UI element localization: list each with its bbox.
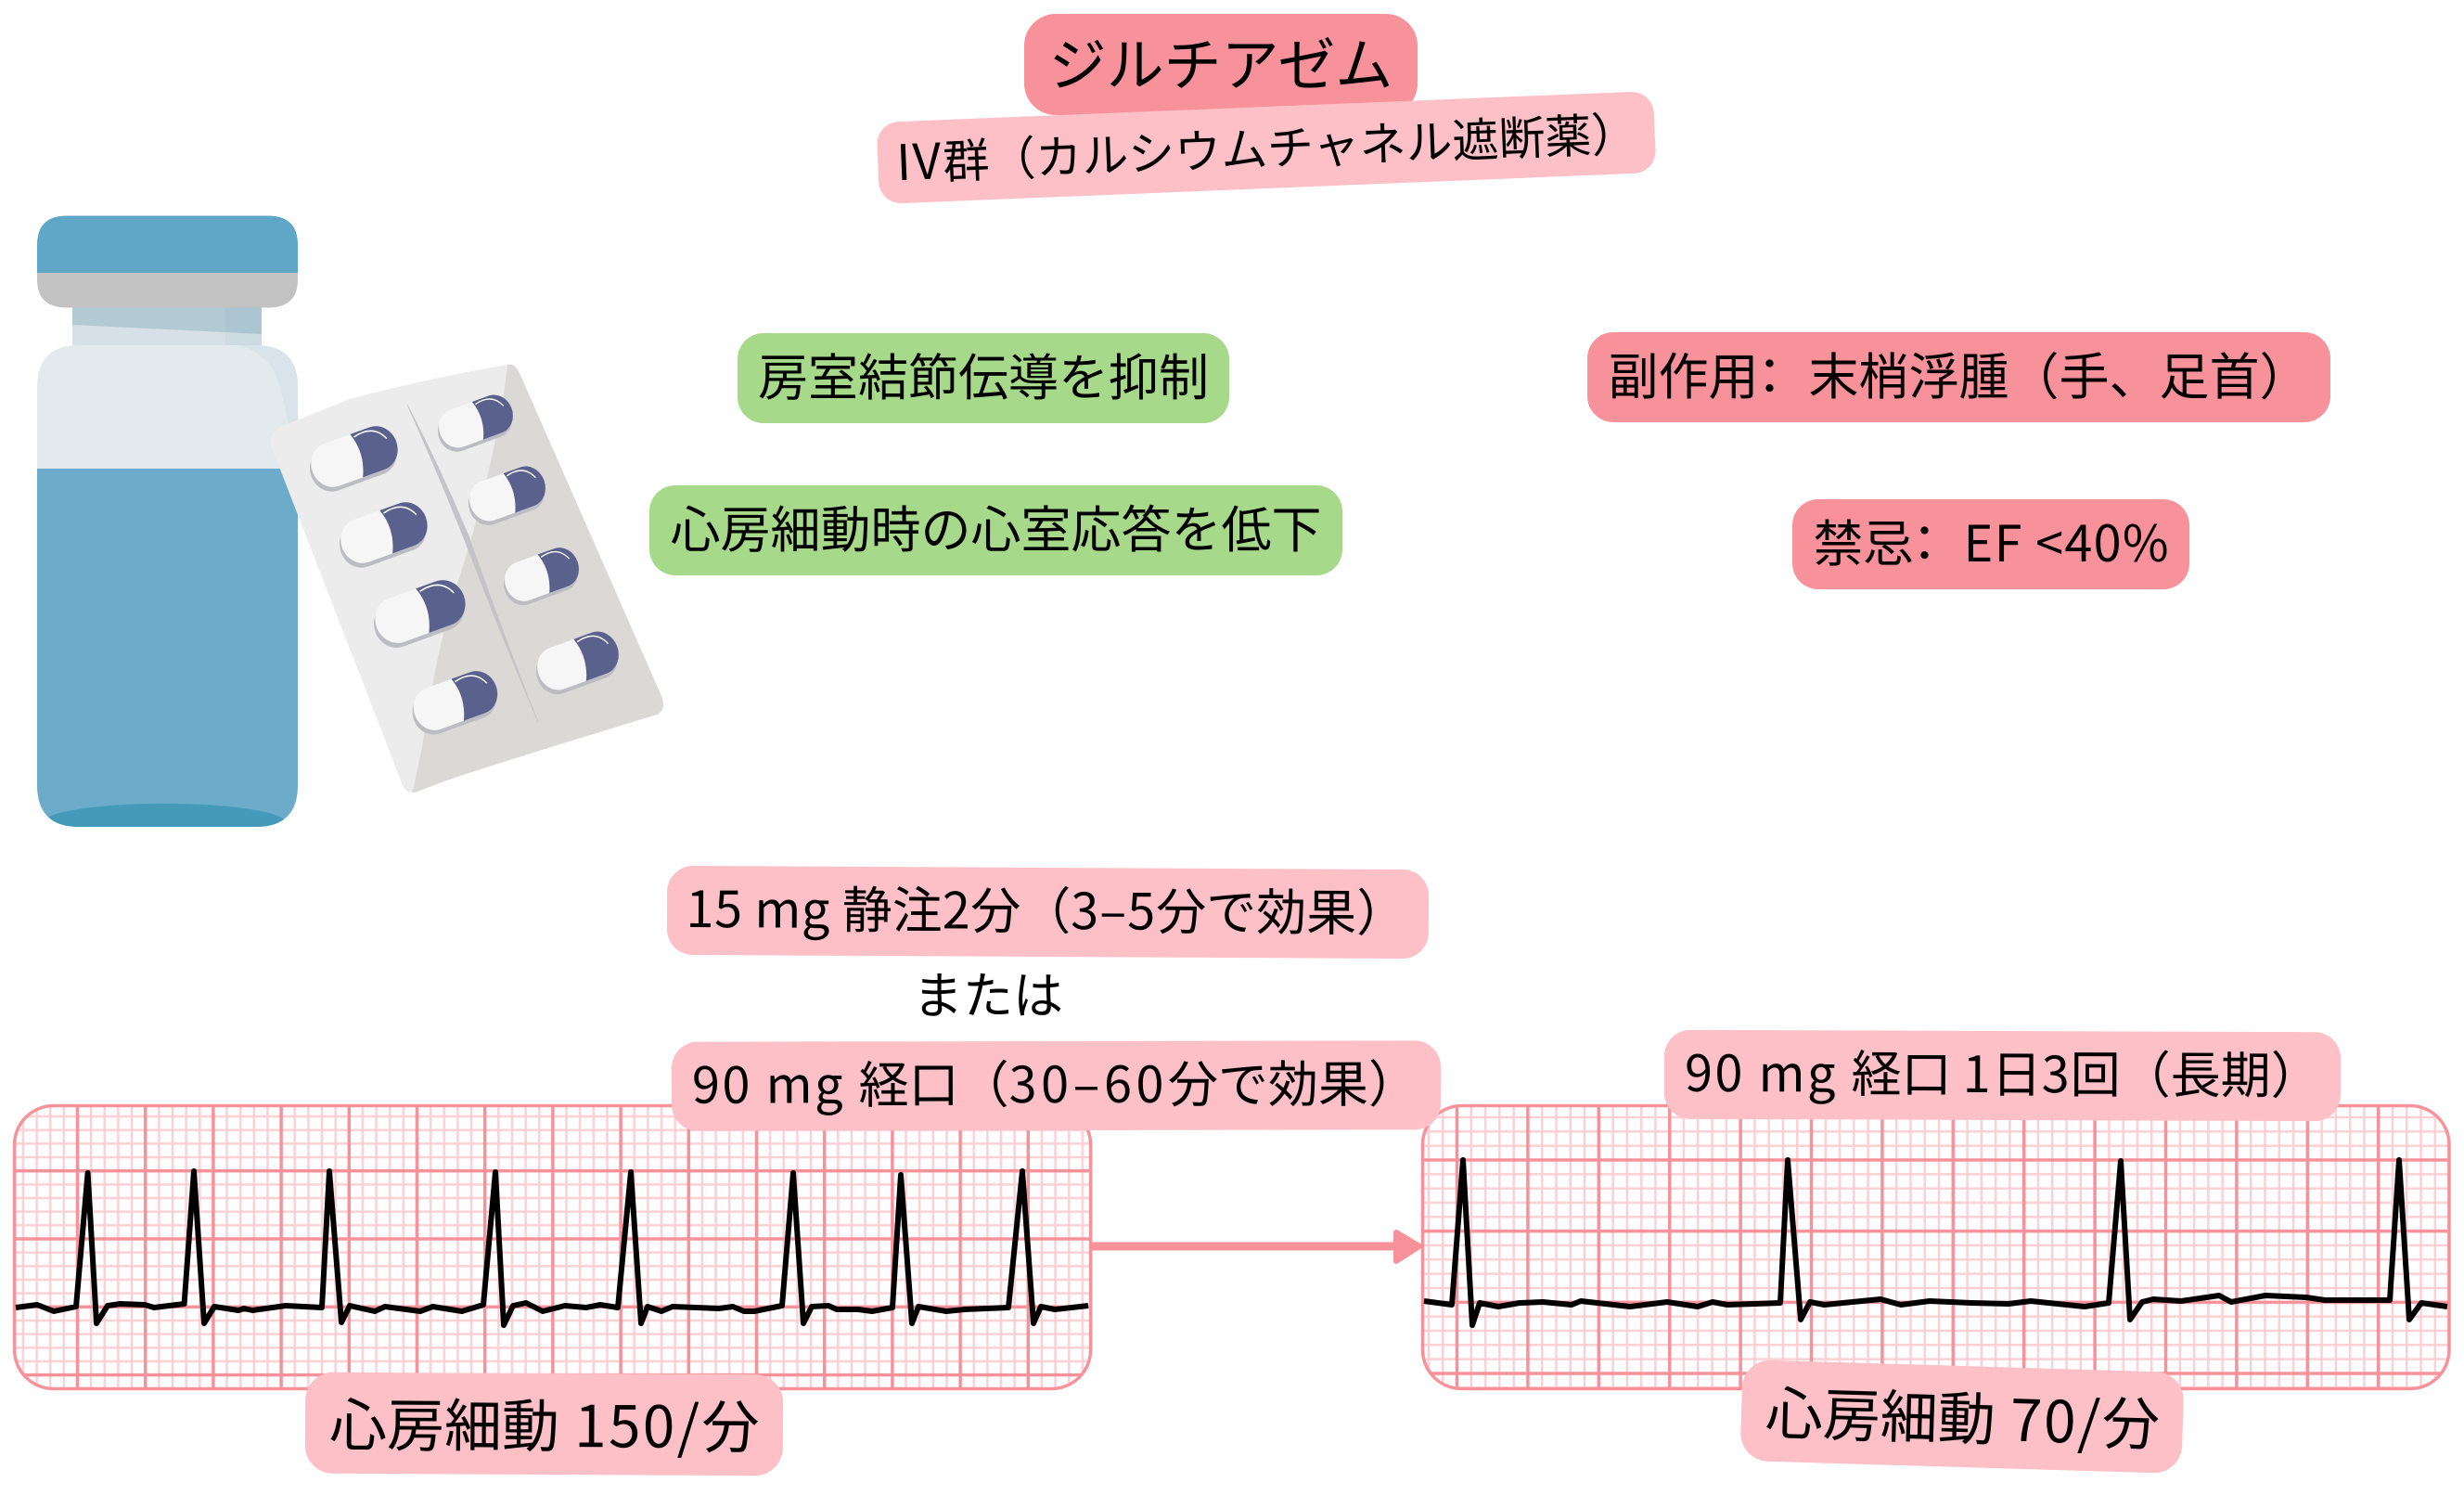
blister crease xyxy=(407,405,538,722)
label: long-term oral dose: 3 xyxy=(2042,1034,2071,1107)
label: AV node effect: 房室結節伝導を抑制 xyxy=(758,336,1209,410)
label: IV dose: 2 xyxy=(942,870,970,943)
capsule 1 xyxy=(302,420,405,497)
label: heart rate before: 心房細動 分 xyxy=(329,1378,760,1464)
label: contraindication xyxy=(1792,499,2189,589)
label: contraindication: 禁忌 xyxy=(1813,503,1913,575)
label: oral dose: 90 mg xyxy=(691,1044,845,1117)
label: contraindication: EF <40% xyxy=(1963,503,2170,575)
capsule 7 xyxy=(497,543,585,611)
label: long-term oral dose: 経口 日 回（長期） xyxy=(1851,1033,2321,1108)
label: IV dose: 15 mg xyxy=(686,868,830,942)
capsule 2 xyxy=(332,496,435,574)
vial body xyxy=(37,345,298,841)
chart: ECG strip atrial fibrillation 150/min xyxy=(15,1106,1091,1388)
text: or: または xyxy=(913,955,1063,1028)
label: long-term oral dose xyxy=(1664,1030,2341,1121)
label: long-term oral dose: 90 mg xyxy=(1685,1033,1838,1106)
capsule 4 xyxy=(405,665,505,741)
subtitle: drug class: IV xyxy=(894,122,943,195)
icon: medicine vial xyxy=(37,215,298,841)
label: side effects: 副作用 末梢浮腫（手、足首） xyxy=(1609,336,2310,408)
capsule 3 xyxy=(366,574,473,654)
blister foil, shaded side xyxy=(412,365,663,793)
label: IV dose xyxy=(666,865,1429,959)
label: IV dose: 3–5 xyxy=(1071,870,1156,944)
blister foil, light side xyxy=(270,365,663,793)
label: oral dose: 30–60 xyxy=(1008,1043,1167,1117)
label: heart rate before: 150/ xyxy=(574,1380,702,1463)
subtitle: drug class: 群（カルシウムチャネル遮断薬） xyxy=(941,97,1638,192)
label: heart rate after: 70/ xyxy=(2008,1373,2103,1460)
icon: blister pack of capsules xyxy=(270,365,663,793)
label: contraindication: ： xyxy=(1900,503,1950,575)
label: ventricular rate effect: 心房細動時の心室応答を低下 xyxy=(670,488,1321,562)
label: heart rate after: 心房細動 分 xyxy=(1764,1366,2161,1462)
label: long-term oral dose: 1 xyxy=(1963,1034,1992,1107)
capsule 5 xyxy=(431,390,520,457)
label: oral dose xyxy=(671,1040,1440,1130)
capsule 6 xyxy=(462,461,552,531)
label: IV dose: 静注 分（ 分で効果） xyxy=(841,869,1406,946)
label: side effects: ： xyxy=(1744,336,1794,408)
title: drug name: ジルチアゼム xyxy=(1049,19,1392,102)
arrow: ECG before to after xyxy=(1092,1232,1419,1261)
chart: ECG strip atrial fibrillation 70/min xyxy=(1423,1106,2449,1388)
vial cap xyxy=(37,215,298,308)
capsule 8 xyxy=(529,626,626,700)
label: oral dose: 経口（ 分で効果） xyxy=(858,1043,1418,1117)
illustration and ECG artwork xyxy=(13,215,2451,1390)
vial neck xyxy=(72,307,262,346)
